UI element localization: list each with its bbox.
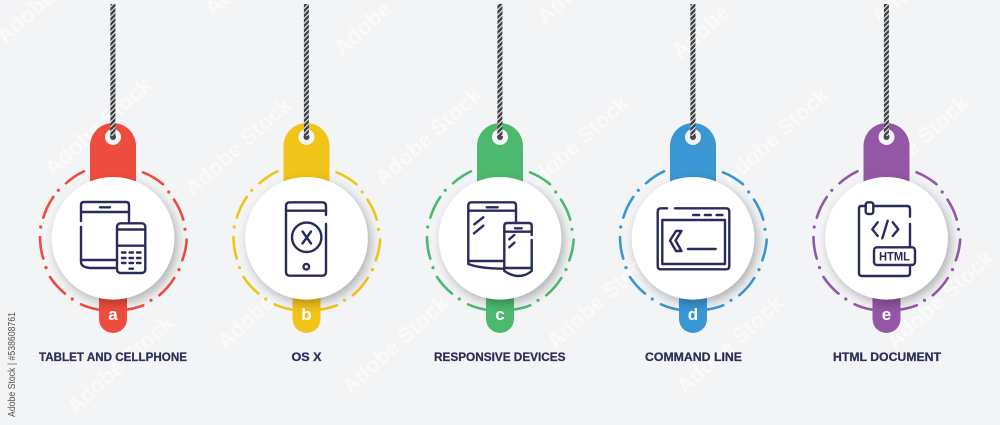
watermark: Adobe Stock	[370, 82, 487, 191]
watermark: Adobe Stock	[542, 245, 659, 354]
stock id caption: Adobe Stock | #538608761	[7, 312, 18, 417]
panel: responsive devices	[426, 4, 574, 364]
tag hole	[298, 129, 314, 145]
watermark: Adobe Stock	[882, 245, 999, 354]
watermark: Adobe Stock	[337, 290, 454, 399]
letter e: e	[882, 305, 891, 324]
tag hole	[685, 129, 701, 145]
white circle	[439, 177, 561, 300]
white circle	[52, 177, 174, 300]
label: TABLET AND CELLPHONE	[39, 350, 187, 364]
icon: phone with x	[286, 202, 326, 276]
tag hole	[878, 129, 894, 145]
icon: tablet and phone outlines	[468, 202, 532, 276]
watermark: Adobe Stock	[672, 290, 789, 399]
watermark: Adobe Stock	[40, 72, 157, 181]
rope	[690, 4, 695, 136]
panel: command line	[619, 4, 767, 364]
white circle	[245, 177, 368, 300]
hanging tag	[90, 123, 136, 333]
watermark: Adobe Stock	[857, 90, 974, 199]
label: HTML DOCUMENT	[833, 350, 942, 364]
dashed ring	[39, 171, 187, 310]
tag hole	[492, 129, 508, 145]
icon: tablet and phone	[81, 202, 145, 273]
icon: terminal window	[658, 208, 729, 269]
icon: html document: HTML	[879, 252, 910, 264]
label: RESPONSIVE DEVICES	[434, 350, 566, 364]
label: COMMAND LINE	[645, 350, 742, 364]
tag hole	[105, 129, 121, 145]
watermark: Adobe Stock	[180, 92, 297, 201]
letter d: d	[688, 305, 698, 324]
watermark: Adobe	[667, 0, 734, 64]
panel: os x	[233, 4, 380, 364]
hanging tag	[670, 123, 716, 333]
dashed ring	[233, 171, 380, 310]
label: OS X	[292, 350, 322, 364]
watermark: Adobe Stock	[717, 82, 834, 191]
letter c: c	[495, 305, 505, 324]
hanging tag	[477, 123, 523, 333]
letter b: b	[301, 305, 312, 324]
panel: tablet and cellphone	[39, 4, 187, 364]
watermark: Adobe Stock	[212, 245, 329, 354]
white circle	[825, 177, 948, 300]
watermark: Adobe Stock	[62, 310, 179, 419]
watermark: Adobe Stock	[517, 90, 634, 199]
rope	[110, 4, 115, 136]
rope	[304, 4, 309, 136]
dashed ring	[426, 171, 574, 310]
hanging tag	[284, 123, 330, 333]
dashed ring	[813, 171, 960, 310]
rope	[884, 4, 889, 136]
panel: html document	[813, 4, 960, 364]
letter a: a	[108, 305, 118, 324]
icon: html document	[859, 202, 915, 276]
white circle	[632, 177, 754, 300]
hanging tag	[864, 123, 910, 333]
dashed ring	[619, 171, 767, 310]
rope	[497, 4, 502, 136]
